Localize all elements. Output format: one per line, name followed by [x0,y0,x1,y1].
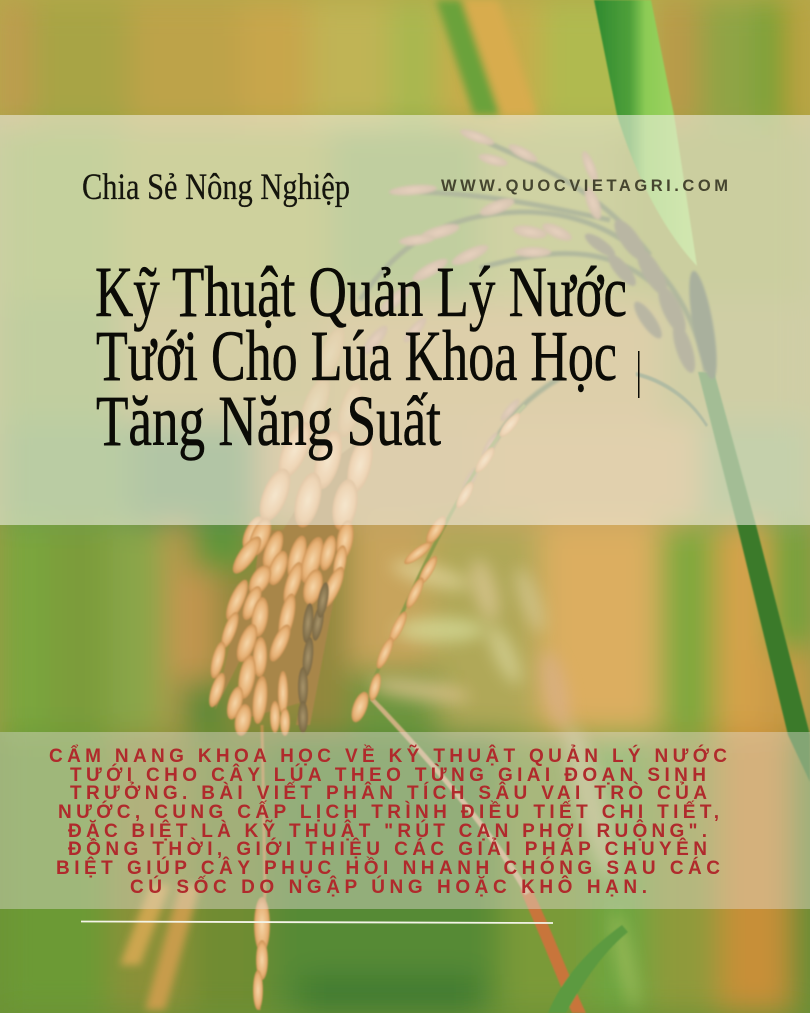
section label: Chia Sẻ Nông Nghiệp [82,167,350,208]
rice stem, right side [370,372,810,1013]
description text: NƯỚC, CUNG CẤP LỊCH TRÌNH ĐIỀU TIẾT CHI TIẾT, [58,801,719,823]
description text: ĐỒNG THỜI, GIỚI THIỆU CÁC GIẢI PHÁP CHUYÊN [68,838,707,860]
description text: CẨM NANG KHOA HỌC VỀ KỸ THUẬT QUẢN LÝ NƯỚC [49,745,727,767]
description text: TƯỚI CHO CÂY LÚA THEO TỪNG GIAI ĐOẠN SINH [70,764,706,786]
title [95,252,640,461]
icon: green rice leaf blade [594,0,697,266]
description text [49,745,727,898]
panel: translucent header panel [0,115,810,525]
description text: TRƯỞNG. BÀI VIẾT PHÂN TÍCH SÂU VAI TRÒ CỦA [70,782,707,804]
second slender rice strand [348,405,525,724]
website address: WWW.QUOCVIETAGRI.COM [441,177,728,195]
divider line [81,922,553,923]
title: Tưới Cho Lúa Khoa Học [96,316,617,396]
title: Tăng Năng Suất [96,381,441,461]
lower golden rice panicle [206,323,377,1010]
description text: BIỆT GIÚP CÂY PHỤC HỒI NHANH CHÓNG SAU CÁC [56,857,720,879]
upper rice panicle [359,126,722,494]
description text: CÚ SỐC DO NGẬP ÚNG HOẶC KHÔ HẠN. [130,876,647,898]
title: Kỹ Thuật Quản Lý Nước [95,252,627,332]
description text: ĐẶC BIỆT LÀ KỸ THUẬT "RÚT CẠN PHƠI RUỘNG". [68,820,707,842]
panel: translucent description panel [0,732,810,909]
